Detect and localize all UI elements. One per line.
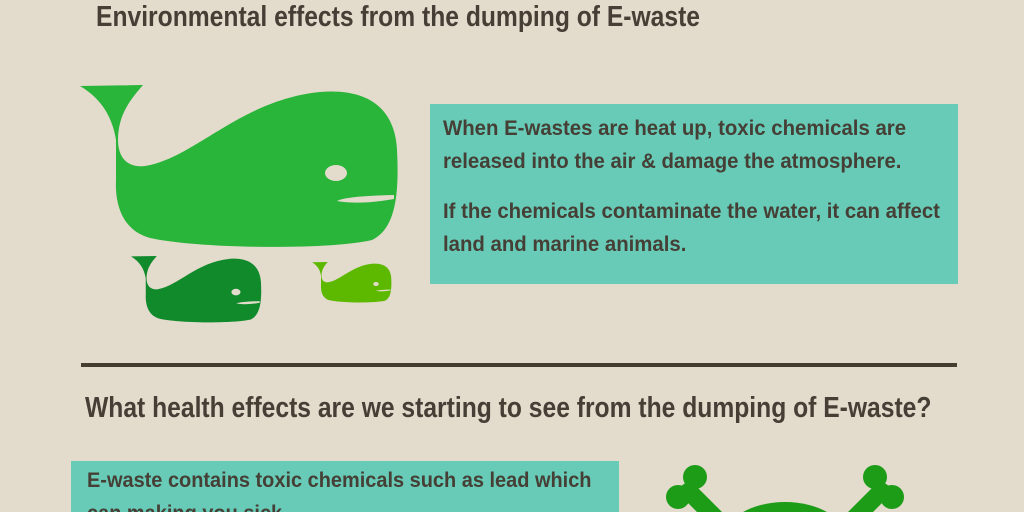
panel: environmental text [430, 104, 958, 284]
title: Environmental effects from the dumping of E-waste [96, 1, 700, 33]
icon: skull and crossbones [666, 465, 904, 512]
small whale [312, 262, 391, 302]
panel: environmental text: If the chemicals contaminate the water, it can affect [443, 200, 940, 223]
medium whale [131, 256, 261, 322]
panel: environmental text: land and marine animals. [443, 233, 686, 256]
divider [81, 363, 957, 367]
panel: environmental text: When E-wastes are heat up, toxic chemicals are [443, 117, 906, 140]
heading: health effects: What health effects are we starting to see from the dumping of E-waste? [85, 392, 931, 424]
panel: environmental text: released into the air & damage the atmosphere. [443, 150, 901, 173]
big whale [80, 85, 398, 247]
panel: health text [71, 461, 619, 512]
panel: health text: E-waste contains toxic chemicals such as lead which [87, 469, 591, 492]
